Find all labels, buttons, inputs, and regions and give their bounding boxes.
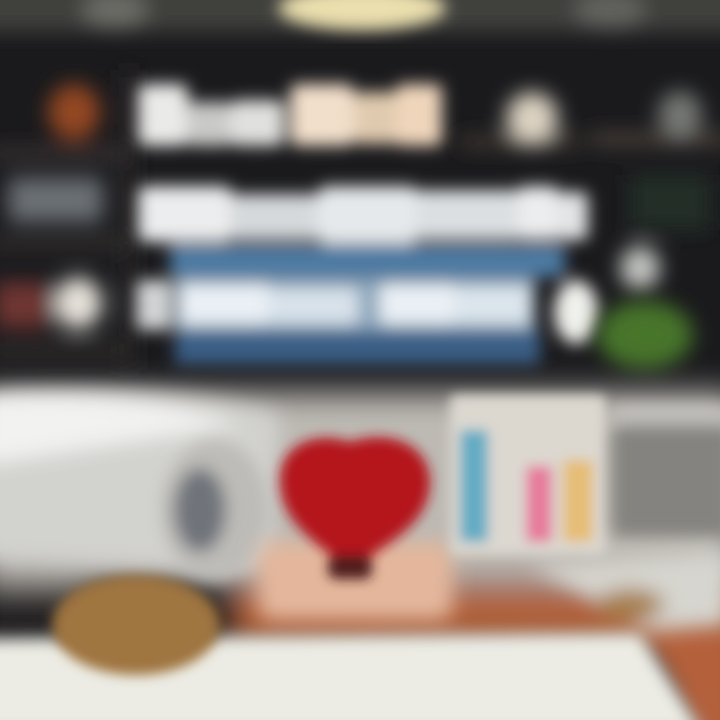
plant <box>597 301 693 369</box>
icon: round dial device <box>161 440 269 580</box>
second heading line <box>138 186 588 244</box>
lower blue band <box>175 330 540 364</box>
bar: pink <box>526 466 552 542</box>
gray box <box>612 405 720 537</box>
white notebook <box>0 632 705 720</box>
white pillow <box>0 389 280 568</box>
orange tabletop at bottom right <box>640 620 720 720</box>
icon: red heart <box>280 437 430 579</box>
monitor: blurred heading text <box>136 84 598 364</box>
first heading line <box>138 84 442 146</box>
left shelves <box>0 70 134 370</box>
cork coaster <box>52 575 220 675</box>
bar: yellow <box>563 460 593 542</box>
blue band upper <box>170 245 565 277</box>
bar: blue <box>460 430 488 542</box>
third heading line <box>136 280 598 344</box>
papers on right <box>530 550 720 632</box>
right shelves <box>460 91 720 290</box>
bar chart card <box>450 395 606 555</box>
ceiling band <box>0 0 720 32</box>
ceiling light <box>278 0 446 30</box>
table surface back <box>0 392 720 645</box>
third line backing <box>175 278 535 330</box>
stand base <box>258 542 453 620</box>
